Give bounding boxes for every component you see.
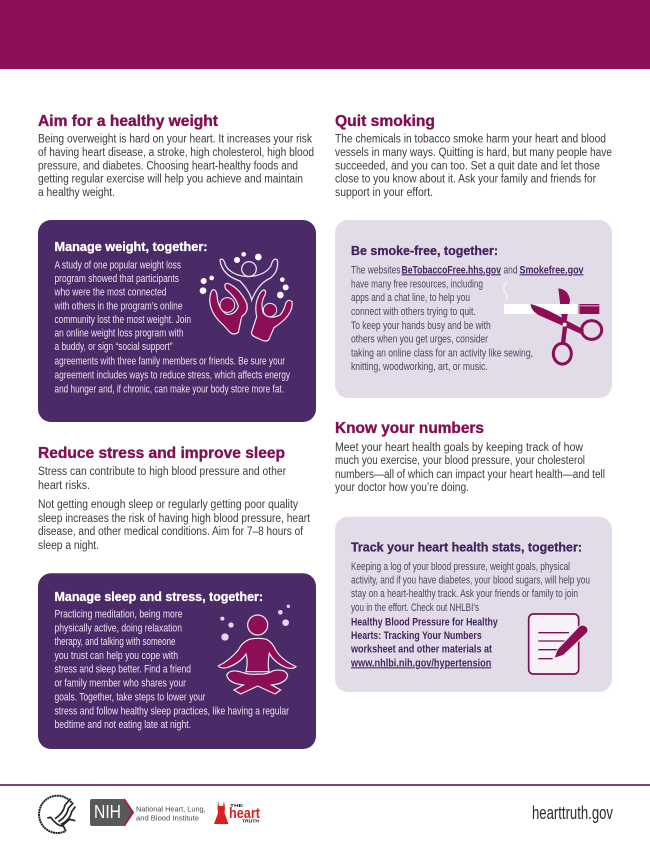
- panel text: manage sleep: bedtime and not eating late at night.: [54, 719, 191, 731]
- panel text: be smoke-free: To keep your hands busy and be with: [351, 320, 491, 332]
- panel text: track stats: [350, 561, 590, 669]
- panel text: track stats: you in the effort. Check out NHLBI’s: [351, 602, 479, 614]
- panel text: be smoke-free: others when you get urges, consider: [351, 334, 488, 346]
- panel: be smoke-free, together: [335, 220, 612, 398]
- panel text: manage weight: and hunger and, if chronic, can make your body store more fat.: [54, 384, 284, 396]
- panel text: track stats: Healthy Blood Pressure for Healthy: [351, 616, 498, 628]
- panel text: be smoke-free: The websites: [351, 264, 401, 276]
- panel: track your heart health stats, together: [335, 517, 612, 692]
- body text: healthy weight: [38, 134, 314, 199]
- panel text: track stats: stay on a heart-healthy track. Ask your friends or family to join: [351, 588, 578, 600]
- panel heading: track stats: Track your heart health stats, together:: [351, 540, 582, 555]
- panel text: manage sleep: Practicing meditation, being more: [54, 609, 182, 621]
- panel text: manage sleep: [54, 609, 289, 731]
- body text: healthy weight: pressure, and diabetes. Choosing heart-healthy foods and: [38, 160, 298, 172]
- logo: NIH: NIH: [94, 802, 121, 822]
- panel text: manage sleep: stress and follow healthy sleep practices, like having a regular: [54, 705, 289, 717]
- panel text: be smoke-free: and: [504, 264, 518, 276]
- panel text: track stats: www.nhlbi.nih.gov/hypertension: [350, 657, 491, 669]
- panel text: manage weight: with others in the program’s online: [54, 300, 182, 312]
- body text: know your numbers: Meet your heart health goals by keeping track of how: [335, 442, 584, 454]
- body text: reduce stress: disease, and other medical conditions. Aim for 7–8 hours of: [38, 526, 304, 538]
- top banner: [0, 0, 650, 69]
- body text: healthy weight: getting regular exercise will help you achieve and maintain: [38, 174, 303, 186]
- body text: know your numbers: [335, 442, 605, 494]
- panel text: track stats: Keeping a log of your blood pressure, weight goals, physical: [351, 561, 570, 573]
- body text: reduce stress: Not getting enough sleep or regularly getting poor quality: [38, 499, 298, 511]
- body text: quit smoking: vessels in many ways. Quitting is hard, but many people have: [335, 147, 612, 159]
- footer: [0, 784, 650, 833]
- logo: NIH: National Heart, Lung,: [136, 805, 206, 814]
- logo: the heart truth: TRUTH: [242, 818, 259, 824]
- panel text: be smoke-free: knitting, woodworking, art, or music.: [351, 361, 488, 373]
- panel text: manage sleep: physically active, doing relaxation: [54, 622, 182, 634]
- panel text: manage sleep: therapy, and talking with someone: [54, 636, 176, 648]
- panel text: manage weight: a buddy, or sign “social support”: [54, 341, 173, 353]
- panel text: be smoke-free: connect with others trying to quit.: [351, 306, 476, 318]
- panel text: be smoke-free: taking an online class for an activity like sewing,: [351, 347, 533, 359]
- logo: the heart truth: heart: [229, 805, 260, 822]
- panel text: manage sleep: goals. Together, take steps to lower your: [54, 691, 206, 703]
- panel text: manage weight: agreement includes ways to reduce stress, which affects energy: [54, 369, 290, 381]
- body text: know your numbers: numbers—all of which can impact your heart health—and tell: [335, 469, 605, 481]
- panel heading: be smoke-free: Be smoke-free, together:: [351, 243, 498, 258]
- logo: HHS seal: [39, 796, 75, 833]
- panel: manage sleep and stress, together: [38, 573, 316, 749]
- body text: healthy weight: a healthy weight.: [38, 187, 115, 199]
- panel text: be smoke-free: have many free resources, including: [351, 278, 483, 290]
- panel text: manage weight: community lost the most weight. Join: [54, 314, 191, 326]
- icon: group of three people: [200, 252, 292, 341]
- panel text: be smoke-free: apps and a chat line, to help you: [351, 292, 470, 304]
- body text: quit smoking: support in your effort.: [335, 187, 433, 199]
- panel heading: manage weight: Manage weight, together:: [54, 239, 208, 254]
- heading: know your numbers: Know your numbers: [335, 420, 484, 437]
- panel text: manage weight: [54, 259, 290, 396]
- panel text: manage sleep: you trust can help you cope with: [54, 650, 178, 662]
- heading: reduce stress: Reduce stress and improve sleep: [38, 445, 285, 462]
- website: hearttruth.gov: hearttruth.gov: [532, 803, 613, 823]
- logo: the heart truth: THE: [230, 803, 243, 808]
- body text: reduce stress: sleep a night.: [38, 540, 99, 552]
- body text: quit smoking: close to you know about it. Ask your family and friends for: [335, 174, 596, 186]
- panel text: track stats: worksheet and other materials at: [350, 644, 492, 656]
- body text: quit smoking: succeeded, and you can too. Set a quit date and let those: [335, 160, 600, 172]
- logo: NIH: [90, 799, 206, 826]
- body text: reduce stress: heart risks.: [38, 480, 90, 492]
- body text: quit smoking: The chemicals in tobacco smoke harm your heart and blood: [335, 134, 606, 146]
- body text: healthy weight: Being overweight is hard on your heart. It increases your risk: [38, 134, 312, 146]
- panel heading: manage sleep: Manage sleep and stress, together:: [54, 589, 263, 604]
- panel text: be smoke-free: Smokefree.gov: [520, 264, 584, 276]
- logo: NIH: and Blood Institute: [136, 814, 199, 823]
- panel text: manage weight: an online weight loss program with: [54, 328, 184, 340]
- panel text: manage sleep: or family member who shares your: [54, 677, 186, 689]
- body text: know your numbers: your doctor how you’re doing.: [335, 482, 469, 494]
- panel text: manage weight: agreements with three family members or friends. Be sure your: [54, 356, 285, 368]
- panel text: manage weight: A study of one popular weight loss: [54, 259, 181, 271]
- heading: aim for a healthy weight: Aim for a healthy weight: [38, 113, 218, 130]
- icon: notepad and pencil: [529, 614, 588, 674]
- section: reduce stress and improve sleep: [38, 445, 311, 552]
- body text: reduce stress: sleep increases the risk of having high blood pressure, heart: [38, 513, 311, 525]
- logo: the heart truth: [214, 801, 260, 824]
- panel: manage weight, together: [38, 220, 316, 422]
- heading: quit smoking: Quit smoking: [335, 113, 435, 130]
- section: quit smoking: [335, 113, 612, 199]
- icon: scissors cutting cigarette: [504, 282, 602, 364]
- icon: meditating person: [218, 605, 296, 694]
- panel text: track stats: Hearts: Tracking Your Numbers: [351, 630, 482, 642]
- body text: healthy weight: of having heart disease, a stroke, high cholesterol, high blood: [38, 147, 314, 159]
- panel text: manage weight: program showed that participants: [54, 273, 179, 285]
- body text: reduce stress: Stress can contribute to high blood pressure and other: [38, 466, 286, 478]
- panel text: be smoke-free: BeTobaccoFree.hhs.gov: [402, 264, 501, 276]
- panel text: manage weight: who were the most connected: [54, 287, 167, 299]
- body text: quit smoking: [335, 134, 612, 199]
- panel text: be smoke-free: [351, 264, 584, 373]
- section: know your numbers: [335, 420, 605, 494]
- body text: reduce stress: [38, 466, 311, 552]
- body text: know your numbers: much you exercise, your blood pressure, your cholesterol: [335, 455, 585, 467]
- panel text: manage sleep: stress and sleep better. Find a friend: [54, 664, 191, 676]
- section: aim for a healthy weight: [38, 113, 314, 199]
